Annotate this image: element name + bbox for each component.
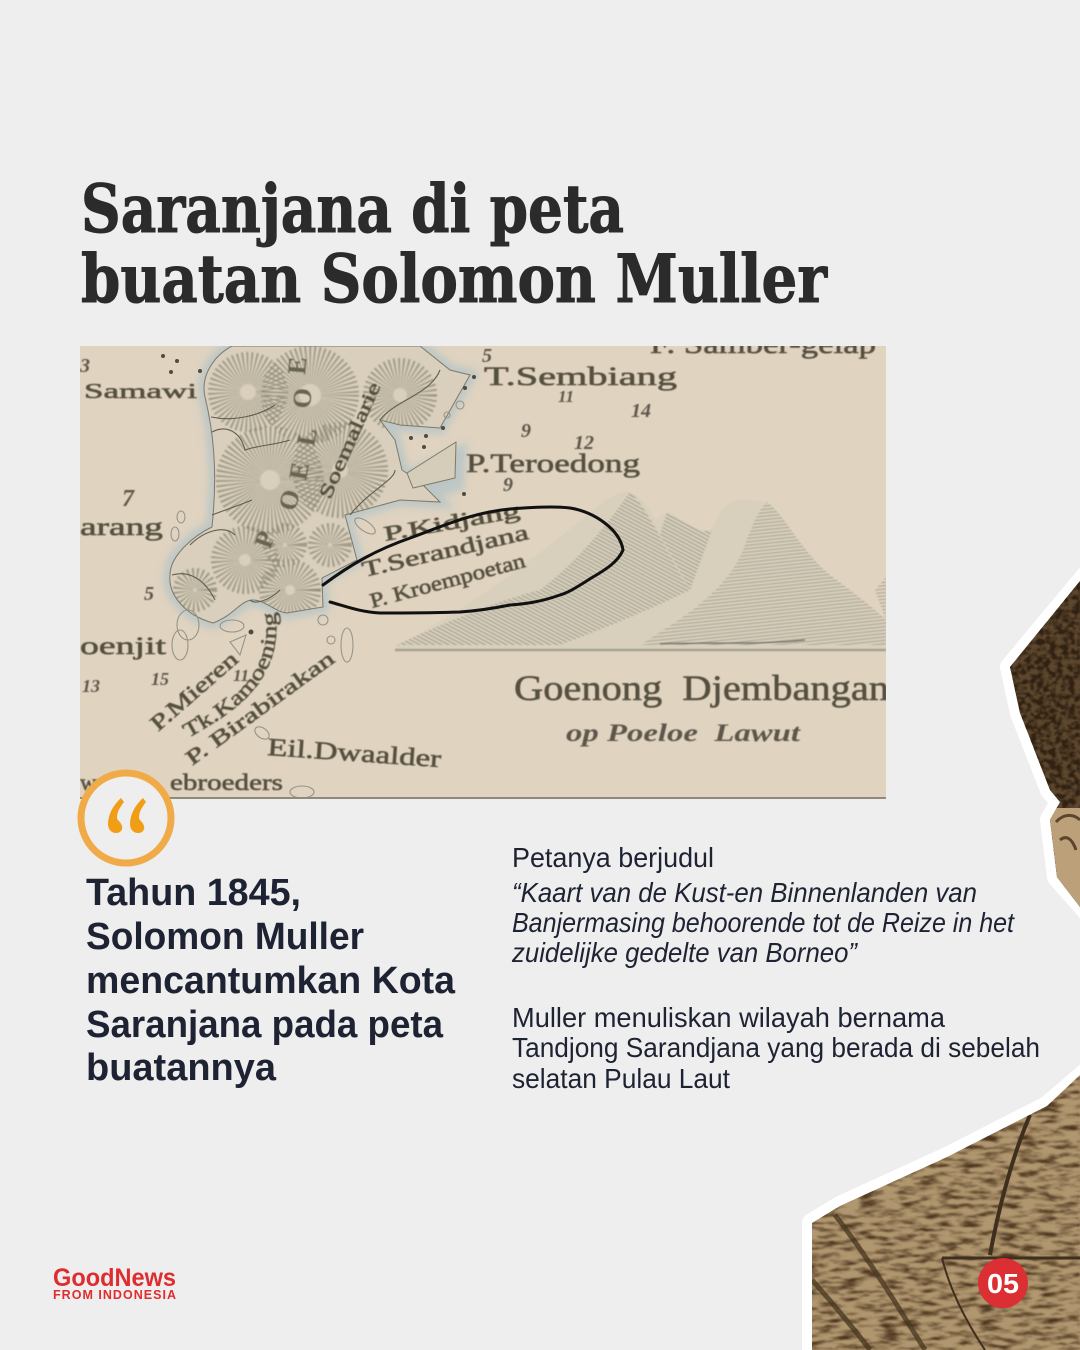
map: place-name labels: Eil.Dwaalder [267, 734, 443, 773]
text block: map title [511, 842, 1015, 968]
page number badge [978, 1258, 1028, 1308]
map: POELOE letters: O [287, 387, 318, 410]
map: place-name labels: w [80, 770, 97, 795]
map: depth numbers: 9 [521, 420, 531, 442]
map: place-name labels: Samawi [84, 379, 197, 403]
map: place-name labels: oenjit [80, 633, 166, 660]
portrait: jacket [810, 1070, 1080, 1350]
pull quote text [86, 872, 456, 1089]
map: Pulau Laut island [170, 346, 470, 623]
map: depth numbers: 13 [82, 676, 100, 696]
map: place-name labels: Goenong Djembangan [514, 668, 889, 708]
map: POELOE letters: E [283, 460, 315, 482]
map: POELOE letters: P [248, 527, 281, 552]
map: Pulau Teroedong islet [407, 442, 456, 488]
icon: quote mark badge [81, 773, 171, 863]
text block: map title: zuidelijke gedelte van Borneo” [511, 937, 859, 968]
map: POELOE letters: E [282, 356, 312, 376]
text block: map description [512, 1002, 1040, 1094]
map: place-name labels: arang [80, 514, 164, 541]
map: place-name labels [80, 346, 886, 792]
pull quote text: mencantumkan Kota [86, 960, 456, 1002]
title: Saranjana di peta [81, 170, 624, 248]
title: buatan Solomon Muller [81, 240, 828, 318]
map: depth numbers: 14 [631, 400, 651, 422]
map: mountains of Goenong Djembangan [395, 492, 886, 650]
map: place-name labels: P.Kidjang [382, 498, 523, 546]
pull quote text: Tahun 1845, [86, 872, 301, 914]
map: depth numbers: 12 [574, 432, 594, 454]
pull quote text: Saranjana pada peta [86, 1004, 444, 1046]
map: hand-drawn black outline [323, 507, 623, 613]
map: place-name labels: ebroeders [170, 770, 283, 795]
map: depth numbers: 15 [151, 669, 169, 689]
map: place-name labels: Tk.Kamoening [180, 612, 282, 737]
map: place-name labels: op Poeloe Lawut [566, 720, 801, 747]
map: POELOE letters [254, 358, 318, 550]
map: place-name labels: T.Sembiang [484, 362, 677, 391]
map: place-name labels: F. Samber-gelap [650, 330, 876, 359]
logo: GoodNews from Indonesia: FROM INDONESIA [53, 1288, 176, 1302]
pull quote text: Solomon Muller [86, 916, 364, 958]
logo: GoodNews from Indonesia: GoodNews [53, 1264, 176, 1292]
map: depth numbers: 11 [233, 666, 249, 685]
map: small islands [171, 401, 464, 798]
map: depth numbers: 9 [503, 474, 513, 496]
map: place-name labels: P.Mieren [145, 646, 243, 736]
map: depth numbers: 5 [144, 583, 154, 605]
map: place-name labels: P. Kroempoetan [367, 548, 528, 613]
text block: map title: Banjermasing behoorende tot de Reize in het [512, 907, 1015, 938]
map: place-name labels: P. Birabirakan [181, 646, 340, 770]
page number badge: 05 [987, 1268, 1019, 1299]
text block: map description: Muller menuliskan wilayah bernama [512, 1002, 945, 1033]
map: depth numbers: 3 [79, 355, 90, 377]
portrait: Solomon Muller cut-out [810, 565, 1080, 1350]
title [81, 170, 828, 318]
map: depth numbers [79, 345, 651, 696]
map: place-name labels: Soemalarie [315, 379, 385, 502]
map: coastal water tint [170, 346, 470, 623]
map: POELOE letters: O [273, 487, 306, 514]
map: depth numbers: 11 [558, 387, 574, 406]
map: POELOE letters: L [291, 426, 323, 448]
map: depth numbers: 7 [122, 486, 135, 512]
portrait: hair and ear [1010, 581, 1080, 907]
map: place-name labels: P.Teroedong [466, 449, 640, 478]
pull quote text: buatannya [86, 1047, 277, 1089]
map: depth numbers: 5 [482, 345, 492, 367]
panel: historical map [78, 346, 886, 833]
map: place-name labels: T.Serandjana [360, 519, 531, 582]
text block: map title: “Kaart van de Kust-en Binnenlanden van [512, 877, 977, 908]
text block: map title: Petanya berjudul [512, 842, 714, 873]
text block: map description: Tandjong Sarandjana yang berada di sebelah [512, 1032, 1040, 1063]
map: reef dots [161, 354, 476, 634]
portrait: white sticker edge [812, 565, 1080, 1350]
text block: map description: selatan Pulau Laut [512, 1063, 730, 1094]
